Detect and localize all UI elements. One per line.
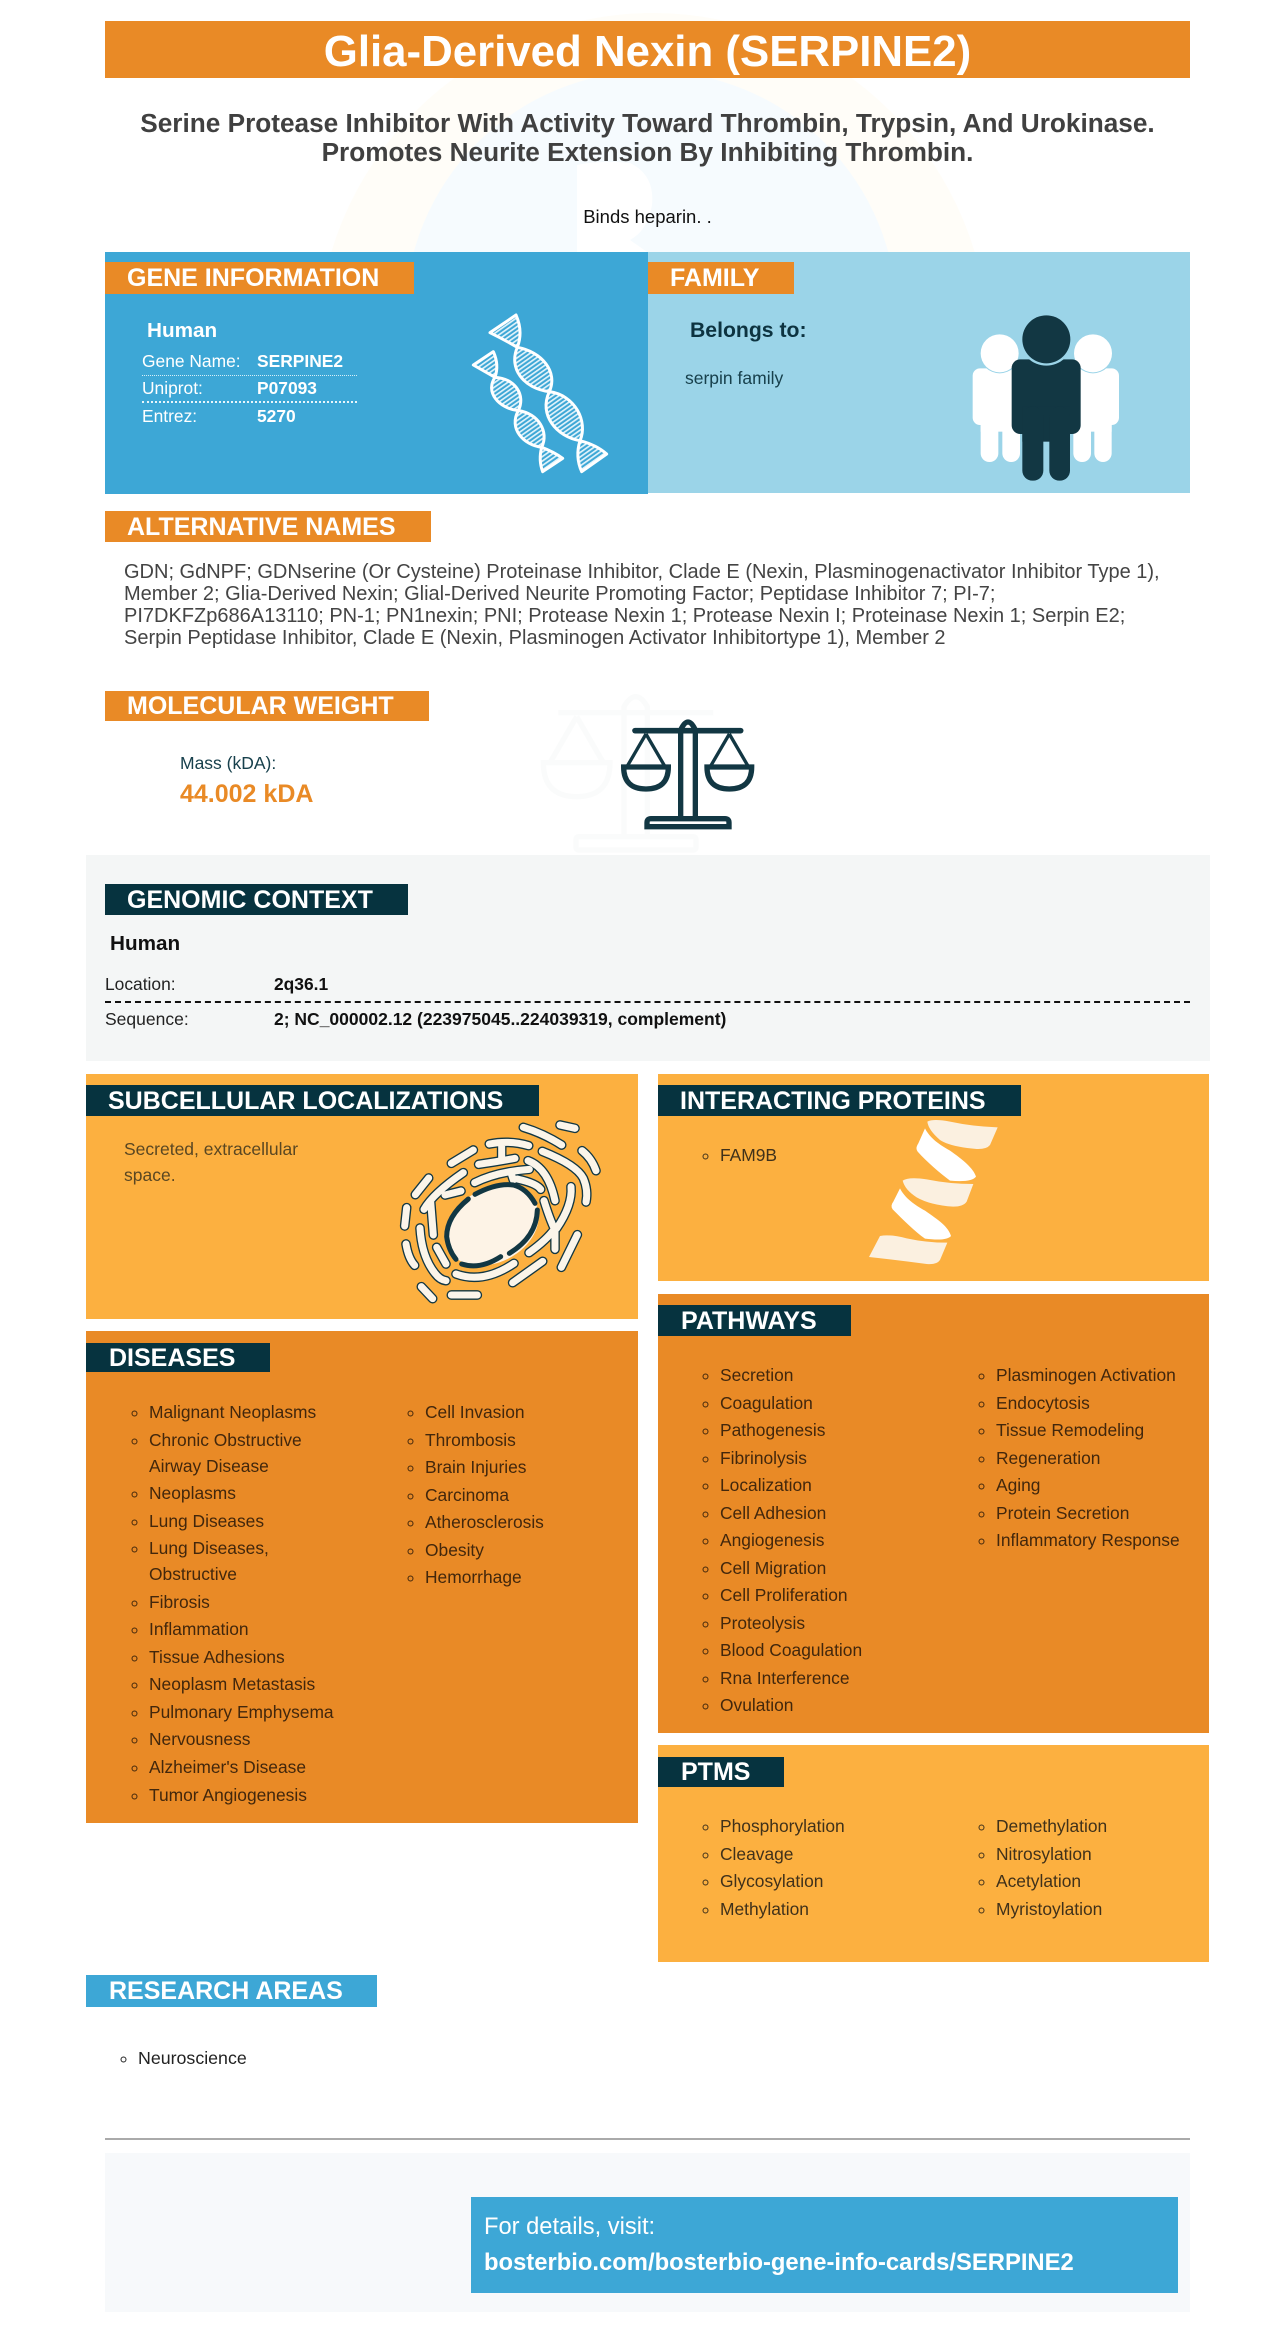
list column 1: Neoplasm Metastasis: [149, 1674, 315, 1694]
list column 1: Angiogenesis: [720, 1530, 824, 1550]
list column 2: Inflammatory Response: [996, 1530, 1180, 1550]
panel: interacting proteins: [658, 1074, 1209, 1281]
location row: [105, 974, 328, 994]
sequence row: Sequence:: [105, 1009, 189, 1029]
heading: gene information: GENE INFORMATION: [127, 264, 379, 292]
mass label: Mass (kDA):: [180, 753, 276, 773]
list column 1: Glycosylation: [720, 1871, 823, 1891]
location row: Location:: [105, 974, 176, 994]
list column 1: Cell Proliferation: [720, 1585, 848, 1605]
location row: 2q36.1: [274, 974, 328, 994]
background watermark logo: [414, 78, 888, 252]
icon: protein ribbon: [869, 1120, 998, 1264]
list column 1: [702, 1816, 845, 1918]
list column 2: [978, 1816, 1107, 1918]
list column 1: Fibrinolysis: [720, 1448, 807, 1468]
belongs to label: Belongs to:: [690, 319, 807, 342]
heading: diseases: DISEASES: [109, 1344, 235, 1372]
list column 1: Ovulation: [720, 1695, 793, 1715]
list column 2: Obesity: [425, 1540, 484, 1560]
species label: Human: [110, 932, 180, 955]
heading: family: [648, 262, 794, 294]
gene details table: Uniprot:: [142, 378, 203, 398]
mass value: 44.002 kDA: [180, 780, 313, 808]
sequence row: 2; NC_000002.12 (223975045..224039319, complement): [274, 1009, 726, 1029]
list column 1: Tumor Angiogenesis: [149, 1785, 307, 1805]
family value: serpin family: [685, 368, 783, 388]
panel: gene information: [105, 252, 648, 494]
icon: dna: [472, 313, 608, 474]
alternative names text: [124, 561, 1160, 649]
alternative names text: PI7DKFZp686A13110; PN-1; PN1nexin; PNI; Protease Nexin 1; Protease Nexin I; Proteinase Nexin 1; Serpin E2;: [124, 605, 1125, 627]
list column 1: Cell Adhesion: [720, 1502, 826, 1522]
list column 1: Lung Diseases: [149, 1511, 264, 1531]
list column 1: Pathogenesis: [720, 1420, 825, 1440]
list column 2: Demethylation: [996, 1816, 1107, 1836]
list column 1: Alzheimer's Disease: [149, 1757, 306, 1777]
icon: people group: [972, 315, 1119, 481]
list column 1: Nervousness: [149, 1729, 250, 1749]
icon: balance scale: [621, 719, 754, 830]
list column 1: Cleavage: [720, 1844, 793, 1864]
alternative names text: GDN; GdNPF; GDNserine (Or Cysteine) Proteinase Inhibitor, Clade E (Nexin, Plasminogenactivator Inhibitor Type 1),: [124, 561, 1160, 583]
localization text: Secreted, extracellular space.: [124, 1139, 298, 1185]
callout: details link: [471, 2197, 1178, 2293]
list column 1: Methylation: [720, 1898, 809, 1918]
list column 2: Tissue Remodeling: [996, 1420, 1144, 1440]
description text: Binds heparin. .: [583, 206, 712, 227]
list column 1: Phosphorylation: [720, 1816, 845, 1836]
list column 1: Airway Disease: [149, 1456, 269, 1476]
list column 2: Cell Invasion: [425, 1402, 525, 1422]
list column 2: Carcinoma: [425, 1485, 509, 1505]
list column 1: [702, 1365, 862, 1715]
list column 1: Tissue Adhesions: [149, 1647, 285, 1667]
panel: genomic context: [86, 855, 1210, 1061]
list column 1: Lung Diseases,: [149, 1538, 269, 1558]
list column 2: Hemorrhage: [425, 1567, 522, 1587]
footer panel: [105, 2153, 1190, 2312]
heading: pathways: [658, 1305, 851, 1336]
list column 1: Obstructive: [149, 1564, 237, 1584]
watermark: faint scale: [520, 690, 780, 855]
list column 2: Aging: [996, 1475, 1040, 1495]
list column 1: Chronic Obstructive: [149, 1430, 302, 1450]
list column 1: Inflammation: [149, 1619, 249, 1639]
subtitle: Serine Protease Inhibitor With Activity Toward Thrombin, Trypsin, And Urokinase.: [140, 108, 1155, 138]
list column 2: Regeneration: [996, 1448, 1100, 1468]
species label: Human: [147, 319, 217, 342]
research areas list: Neuroscience: [138, 2048, 247, 2068]
callout: details link: bosterbio.com/bosterbio-gene-info-cards/SERPINE2: [484, 2249, 1074, 2276]
heading: research areas: RESEARCH AREAS: [109, 1977, 343, 2005]
list column 1: Proteolysis: [720, 1612, 805, 1632]
title banner: [105, 21, 1190, 78]
panel: pathways: [658, 1294, 1209, 1733]
list column 1: Secretion: [720, 1365, 793, 1385]
list column 1: Fibrosis: [149, 1592, 210, 1612]
gene details table: Gene Name:: [142, 351, 241, 371]
list column 1: Localization: [720, 1475, 812, 1495]
heading: genomic context: GENOMIC CONTEXT: [127, 886, 373, 914]
list column 1: Blood Coagulation: [720, 1640, 862, 1660]
list column 2: Protein Secretion: [996, 1502, 1129, 1522]
list column 1: Coagulation: [720, 1392, 813, 1412]
list column 2: Thrombosis: [425, 1430, 516, 1450]
list column 1: Cell Migration: [720, 1558, 826, 1578]
heading: pathways: PATHWAYS: [681, 1306, 817, 1334]
subtitle: [140, 108, 1155, 167]
subtitle: Promotes Neurite Extension By Inhibiting Thrombin.: [322, 137, 973, 167]
list column 2: Endocytosis: [996, 1392, 1090, 1412]
panel: diseases: [86, 1331, 638, 1823]
heading: ptms: [658, 1757, 784, 1787]
heading: ptms: PTMS: [681, 1758, 750, 1786]
heading: molecular weight: MOLECULAR WEIGHT: [127, 692, 394, 720]
icon: cell organelle: [400, 1120, 601, 1304]
gene details table: P07093: [257, 378, 317, 398]
list column 2: Acetylation: [996, 1871, 1081, 1891]
list column 2: Myristoylation: [996, 1898, 1102, 1918]
heading: diseases: [86, 1343, 270, 1372]
list column 1: [132, 1402, 334, 1805]
heading: family: FAMILY: [670, 264, 759, 292]
gene details table: [142, 351, 357, 426]
list column 2: [408, 1402, 544, 1587]
gene details table: SERPINE2: [257, 351, 343, 371]
list column 1: Pulmonary Emphysema: [149, 1702, 334, 1722]
list column 2: Nitrosylation: [996, 1844, 1092, 1864]
heading: interacting proteins: INTERACTING PROTEINS: [680, 1086, 986, 1114]
callout: details link: For details, visit:: [484, 2214, 655, 2240]
heading: alternative names: ALTERNATIVE NAMES: [127, 512, 396, 540]
list column 1: Rna Interference: [720, 1668, 850, 1688]
list column 2: [978, 1365, 1180, 1550]
protein list: FAM9B: [720, 1145, 777, 1165]
list column 2: Plasminogen Activation: [996, 1365, 1176, 1385]
gene details table: Entrez:: [142, 406, 197, 426]
list column 2: Atherosclerosis: [425, 1512, 544, 1532]
gene details table: 5270: [257, 406, 296, 426]
list column 1: Malignant Neoplasms: [149, 1402, 316, 1422]
title banner: Glia-Derived Nexin (SERPINE2): [324, 27, 971, 76]
alternative names text: Serpin Peptidase Inhibitor, Clade E (Nexin, Plasminogen Activator Inhibitortype 1), Member 2: [124, 627, 946, 649]
panel: subcellular localizations: [86, 1074, 638, 1319]
panel: ptms: [658, 1745, 1209, 1962]
list column 2: Brain Injuries: [425, 1457, 526, 1477]
alternative names text: Member 2; Glia-Derived Nexin; Glial-Derived Neurite Promoting Factor; Peptidase Inhibitor 7; PI-7;: [124, 583, 995, 605]
panel: family: [648, 252, 1190, 493]
heading: subcellular localizations: SUBCELLULAR LOCALIZATIONS: [108, 1086, 503, 1114]
list column 1: Neoplasms: [149, 1483, 236, 1503]
